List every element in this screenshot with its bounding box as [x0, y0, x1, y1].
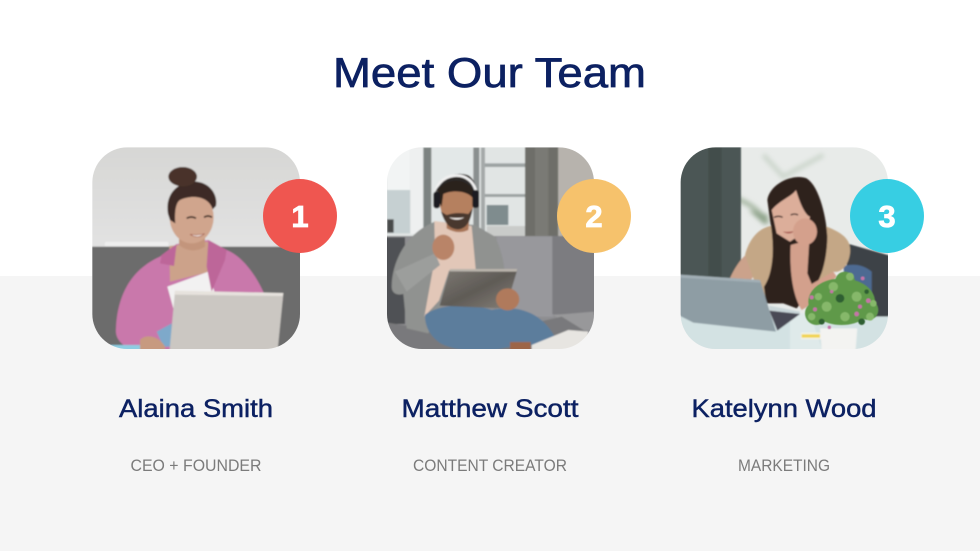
role: MARKETING: MARKETING [738, 456, 830, 475]
panel: team member 3 [675, 143, 924, 475]
role: CEO + FOUNDER: CEO + FOUNDER [130, 456, 262, 475]
badge: number 2: 2 [585, 199, 603, 234]
name: Katelynn Wood: Katelynn Wood [692, 395, 876, 423]
badge: number 1: 1 [291, 199, 309, 234]
title: Meet Our Team [333, 49, 646, 96]
role: CONTENT CREATOR: CONTENT CREATOR [413, 456, 567, 475]
badge: number 3 [850, 179, 924, 253]
photo: man with headphones and tablet on sofa [387, 147, 594, 349]
photo: woman at laptop with potted plant [680, 147, 888, 349]
name: Matthew Scott: Matthew Scott [402, 395, 579, 423]
badge: number 1 [263, 179, 337, 253]
panel: team member 1 [87, 143, 337, 475]
lower grey band [0, 276, 980, 551]
panel: team member 2 [382, 143, 631, 475]
badge: number 2 [557, 179, 631, 253]
badge: number 3: 3 [878, 199, 896, 234]
photo: woman in pink jacket with laptop [87, 143, 307, 353]
name: Alaina Smith: Alaina Smith [119, 395, 273, 423]
